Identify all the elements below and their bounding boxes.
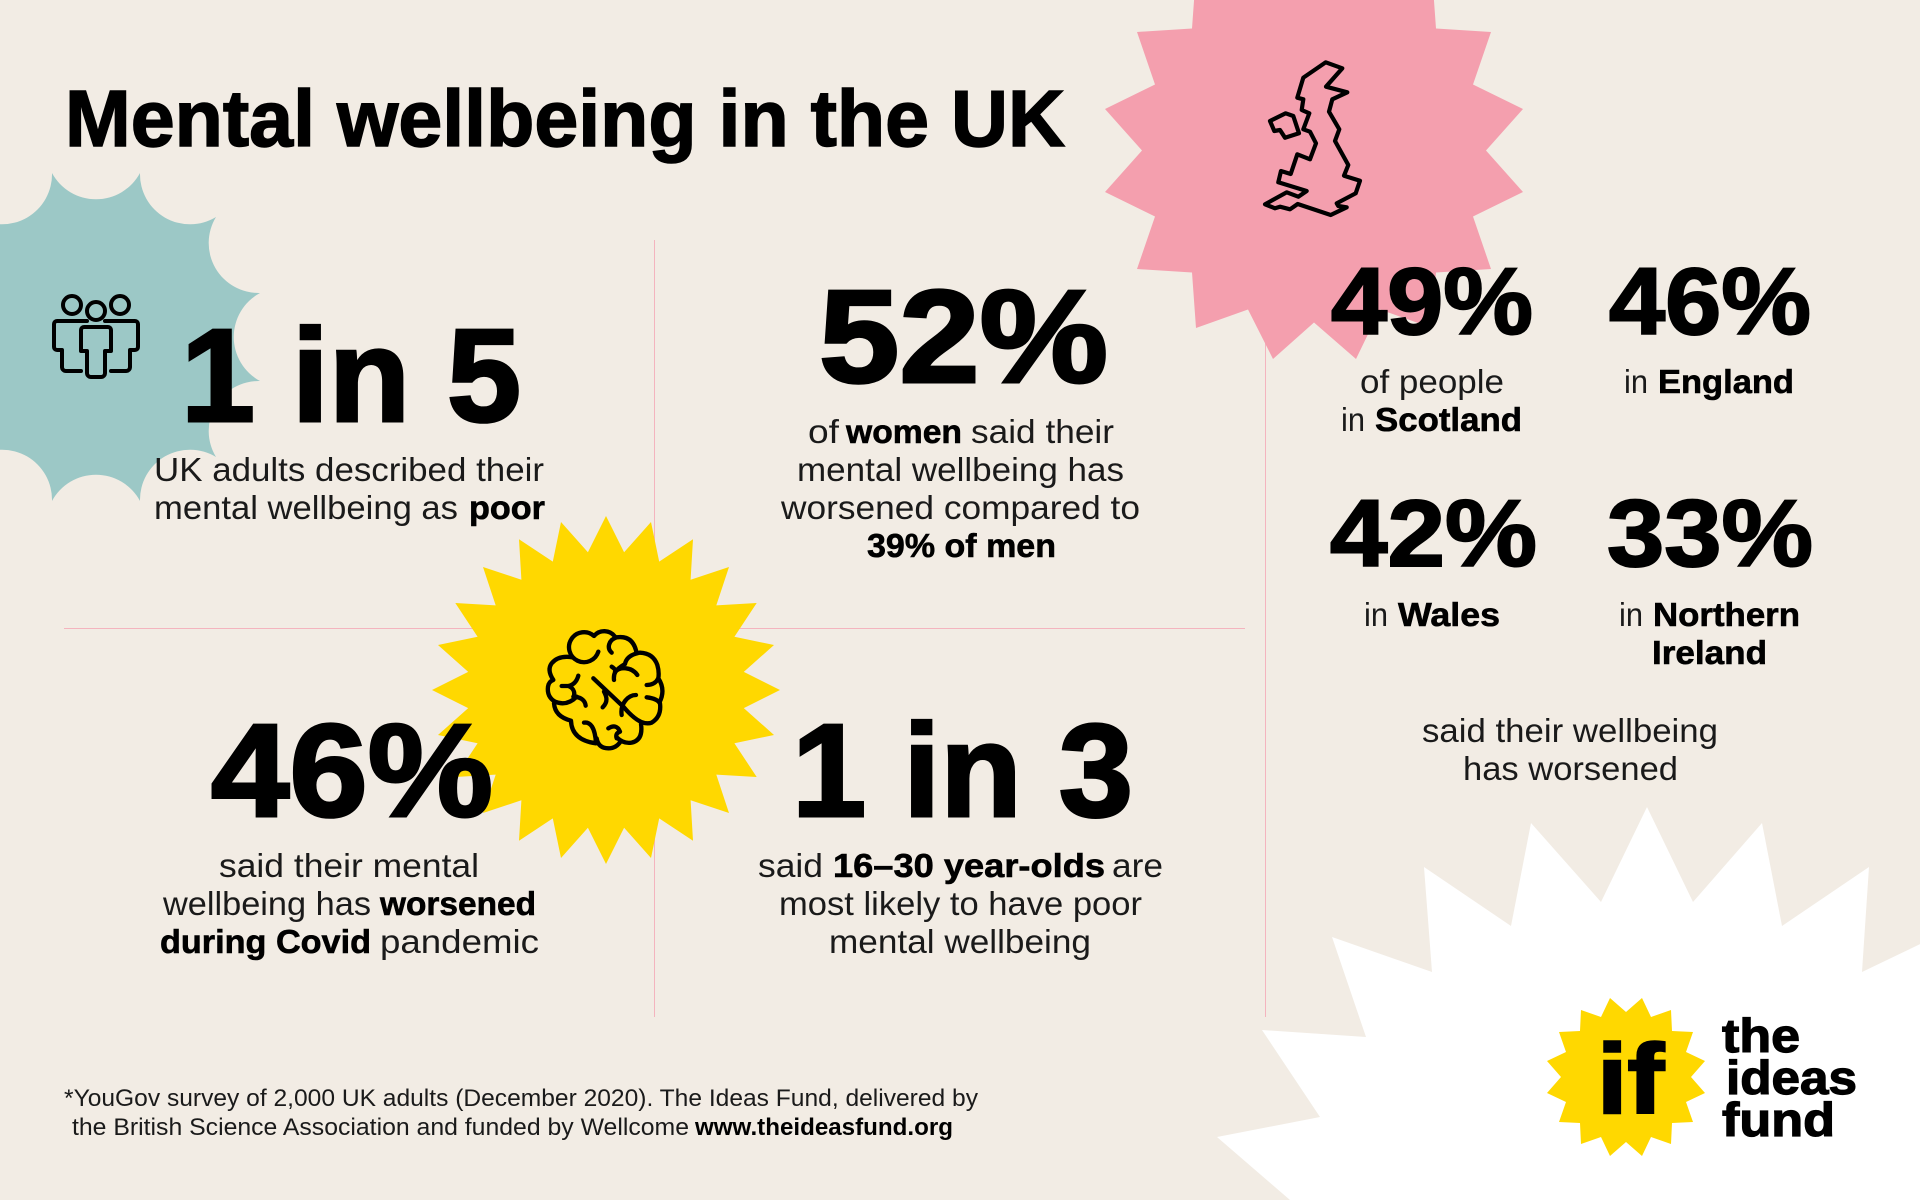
title: Mental wellbeing in the UK [65,74,1065,163]
stat: England [1609,249,1811,400]
stat: Northern Ireland: in [1619,596,1643,633]
footnote: the British Science Association and funded by Wellcome [72,1114,689,1141]
stat: 46% Covid: pandemic [380,923,539,960]
stat: Wales: 42% [1330,481,1537,587]
stat: 1 in 3: most likely to have poor [779,885,1142,922]
stat: 52% women: said their [971,413,1114,450]
stat: 46% Covid: said their mental [219,847,479,884]
stat: England: England [1658,363,1794,400]
stat: 1 in 5: mental wellbeing as [154,489,458,526]
stat: Wales: in [1364,596,1388,633]
stat: 1 in 5 [154,302,545,526]
logo: the ideas fund: the [1722,1009,1800,1062]
stat: 1 in 3: 1 in 3 [792,697,1133,844]
stat: England: 46% [1609,249,1811,355]
stat: Northern Ireland: Northern [1653,596,1800,633]
footnote: *YouGov survey of 2,000 UK adults (December 2020). The Ideas Fund, delivered by [64,1085,978,1112]
stat: 46% Covid: wellbeing has [162,885,371,922]
stat: England: in [1624,363,1648,400]
stat: Northern Ireland: Ireland [1652,634,1767,671]
logo: the ideas fund: ideas [1726,1051,1857,1104]
stat: 46% Covid: worsened [379,885,536,922]
footnote: www.theideasfund.org [694,1114,953,1141]
logo: the ideas fund: fund [1722,1093,1835,1146]
icon: people [54,296,138,377]
burst: white [1217,807,1920,1200]
caption: said their wellbeing has worsened: said their wellbeing [1422,712,1718,749]
stat: 1 in 3: are [1112,847,1163,884]
stat: 46% Covid: 46% [211,697,493,844]
icon: brain [548,631,662,748]
stat: Scotland: 49% [1331,249,1533,355]
stat: 52% women [780,263,1140,564]
stat: 1 in 5: UK adults described their [154,451,544,488]
stat: 52% women: of [808,413,840,450]
stat: Wales: Wales [1398,596,1500,633]
footnote [64,1085,978,1141]
stat: Scotland: Scotland [1375,401,1522,438]
stat: 46% Covid [160,697,539,960]
stat: Northern Ireland: 33% [1607,481,1813,587]
logo: the ideas fund: if [1597,1024,1664,1134]
stat: 1 in 5: poor [469,489,545,526]
stat: 1 in 3 [758,697,1163,960]
burst: teal [0,173,260,501]
stat: Scotland: in [1341,401,1365,438]
stat: 1 in 3: 16–30 year-olds [833,847,1105,884]
caption: said their wellbeing has worsened: has worsened [1463,750,1678,787]
stat: 52% women: worsened compared to [780,489,1140,526]
burst: pink [1105,0,1523,359]
stat: 52% women: women [845,413,962,450]
burst: yellow [432,516,780,864]
icon: UK map [1265,62,1360,215]
stat: Scotland [1331,249,1533,438]
stat: 52% women: mental wellbeing has [797,451,1124,488]
stat: 1 in 3: said [758,847,823,884]
stat: Wales [1330,481,1537,633]
stat: 52% women: 52% [819,263,1108,410]
logo: the ideas fund [1547,998,1857,1156]
stat: 1 in 3: mental wellbeing [829,923,1091,960]
stat: 52% women: 39% of men [867,527,1056,564]
stat: Northern Ireland [1607,481,1813,671]
stat: 1 in 5: 1 in 5 [181,302,521,449]
stat: 46% Covid: during Covid [160,923,371,960]
caption: said their wellbeing has worsened [1422,712,1718,787]
stat: Scotland: of people [1360,363,1504,400]
